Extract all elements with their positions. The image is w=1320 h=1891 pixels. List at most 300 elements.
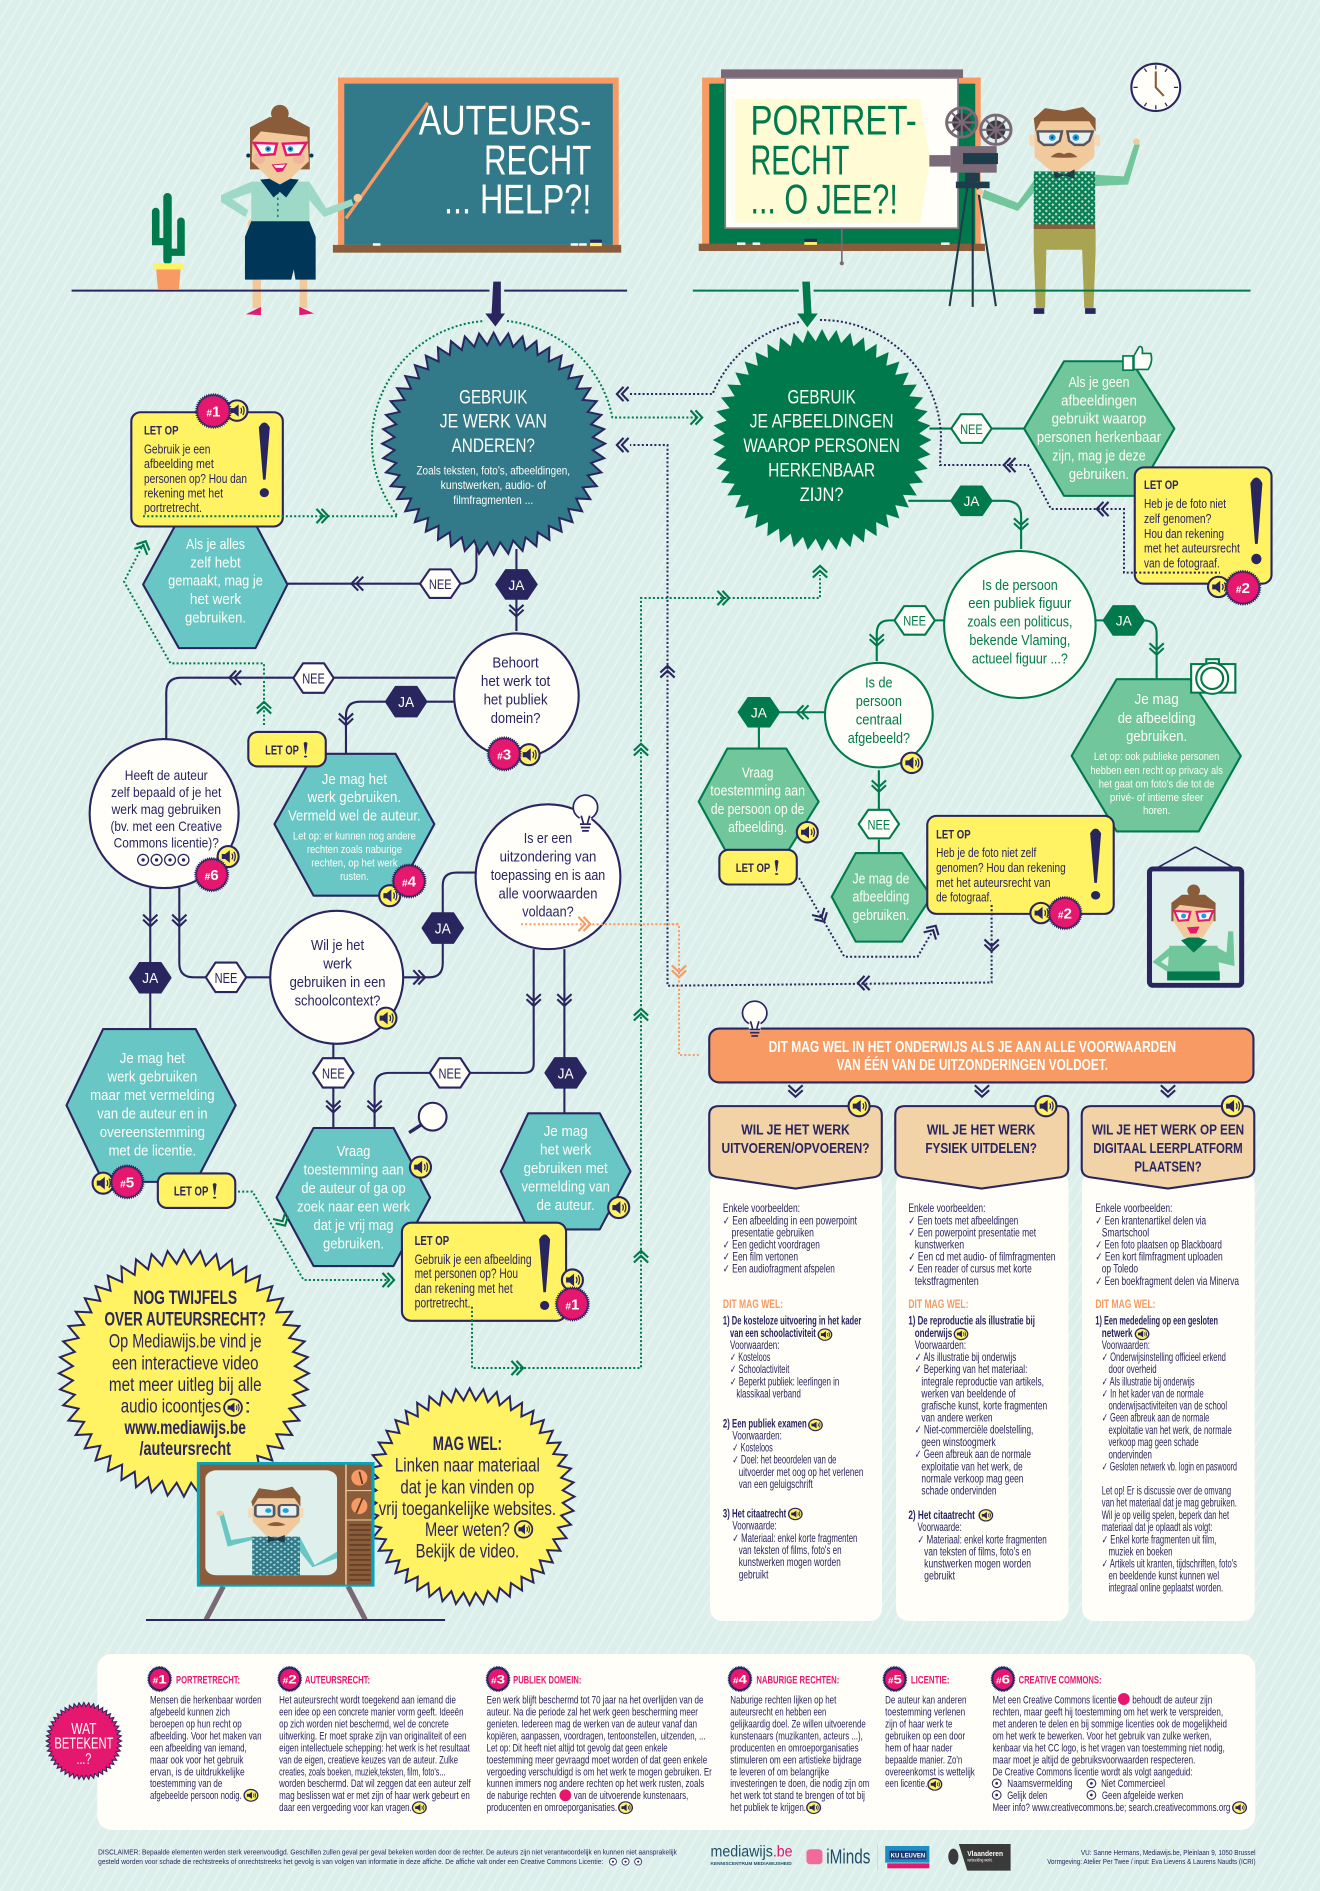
hexagon: je mag het werk gebruiken met vermelding: vermelding van [521,1179,610,1196]
heading: fysiek uitdelen: WIL JE HET WERK [927,1122,1036,1139]
definition: licentie: een licentie. [885,1777,927,1790]
panel: nog twijfels over auteursrecht [59,1250,309,1497]
callout: let op foto niet zelf genomen: Heb je de foto niet zelf [936,845,1036,860]
text: disclaimer: DISCLAIMER: Bepaalde elementen werden sterk vereenvoudigd. Geschillen zullen geval per geval bekeken worden door de rechter. De auteurs zijn niet verantwoordelijk en kunnen niet aansprakelijk [98,1847,677,1856]
callout: let op foto niet zelf genomen: LET OP [936,828,971,841]
callout: let op foto niet zelf genomen: de fotograaf. [936,890,992,905]
definition: licentie: De auteur kan anderen [885,1694,966,1706]
text: fysiek uitdelen voorbeelden en voorwaarden: Voorwaarde: [917,1520,962,1534]
definition: auteursrecht: Het auteursrecht wordt toegekend aan iemand die [279,1694,456,1706]
section: auteursrecht flow [66,633,630,1321]
label: ja: JA [508,577,525,593]
question: is de persoon een publiek figuur: een publiek figuur [968,595,1071,612]
definition: portretrecht: maar ook voor het gebruik [150,1754,244,1766]
panel: question gebruik je afbeeldingen: HERKENBAAR [768,460,875,482]
text: uitvoeren voorbeelden en voorwaarden: ✓ Doel: het beoordelen van de [732,1453,836,1466]
callout: let op auteursrecht fotograaf: LET OP [1144,478,1179,492]
callout: let op portretrecht [131,394,283,527]
callout: let op small [719,850,797,884]
callout: let op portretrecht second [402,1223,589,1321]
definition: naburige rechten [727,1666,869,1814]
text: uitvoeren voorbeelden en voorwaarden: ✓ Kosteloos [732,1441,773,1454]
definition: creative commons: Naamsvermelding [1007,1777,1072,1790]
hexagon: je mag het werk gebruiken met vermelding: het werk [540,1142,592,1159]
hexagon: als je geen afbeeldingen gebruikt: gebruikt waarop [1052,411,1146,428]
text: uitvoeren voorbeelden en voorwaarden: Voorwaarden: [732,1428,782,1442]
hexagon: je mag de afbeelding gebruiken publieke personen [1072,679,1241,831]
hexagon: je mag het werk gebruiken met vermelding [501,1113,630,1229]
callout: let op auteursrecht fotograaf [1135,467,1272,605]
panel: question gebruik je werk van anderen: filmfragmenten ... [453,493,533,507]
definition: auteursrecht: #2 [283,1673,297,1686]
hexagon: als je geen afbeeldingen gebruikt: zijn, mag je deze [1052,448,1146,464]
question: is er een uitzondering van toepassing: Is er een [524,830,572,847]
banner: dit mag wel in het onderwijs: VAN ÉÉN VAN DE UITZONDERINGEN VOLDOET. [837,1055,1108,1074]
text: fysiek uitdelen voorbeelden en voorwaarden: schade ondervinden [921,1484,997,1497]
text: leerplatform voorbeelden en voorwaarden: en beeldende kunst kunnen wel [1108,1568,1219,1582]
panel: nog twijfels over auteursrecht: : [244,1395,251,1417]
text: uitvoeren voorbeelden en voorwaarden: ✓ Een afbeelding in een powerpoint [723,1213,857,1227]
definition: naburige rechten: kunstenaars (muzikanten, acteurs ...), [730,1730,863,1742]
definition: licentie [882,1666,975,1790]
panel: question gebruik je werk van anderen: Zoals teksten, foto's, afbeeldingen, [416,463,570,477]
panel: question gebruik je afbeeldingen: JE AFBEELDINGEN [750,411,894,433]
hexagon: je mag de afbeelding gebruiken publieke personen: horen. [1143,804,1170,817]
text: uitvoeren voorbeelden en voorwaarden: uitvoerder met oog op het verlenen [739,1465,863,1479]
question: is er een uitzondering van toepassing: toepassing en is aan [491,867,605,884]
hexagon: als je geen afbeeldingen gebruikt: afbeeldingen [1061,393,1137,409]
definition: naburige rechten: stimuleren om een artistieke bijdrage [730,1754,862,1766]
text: uitvoeren voorbeelden en voorwaarden: 2) Een publiek examen [723,1416,807,1430]
definition: licentie: gebruiken op een door [885,1730,965,1742]
label: ja: JA [1116,613,1132,629]
callout: let op portretrecht: personen op? Hou dan [144,471,247,486]
callout: let op portretrecht: #1 [206,404,220,420]
badge: wat betekent: ...? [77,1750,91,1767]
text: fysiek uitdelen voorbeelden en voorwaarden: ✓ Niet-commerciële doelstelling, [915,1423,1033,1436]
hexagon: je mag het werk gebruiken met vermelding: de auteur. [537,1197,595,1214]
text: uitvoeren voorbeelden en voorwaarden: Voorwaarde: [732,1519,777,1532]
text: uitvoeren voorbeelden en voorwaarden: kunstwerken mogen worden [739,1555,841,1569]
hexagon: als je geen afbeeldingen gebruikt [1024,361,1174,496]
hexagon: je mag het werk gebruiken met vermelding: Je mag [544,1123,588,1140]
question: behoort het werk tot het publiek domein: domein? [491,710,540,727]
callout: let op foto niet zelf genomen [927,816,1114,929]
definition: licentie: bepaalde manier. Zo'n [885,1754,962,1766]
definition: publiek domein: auteur. Na die periode zal het werk geen bescherming meer [487,1706,698,1718]
section: portretrecht header and first question [693,64,1272,605]
blackboard: portretrecht with projection screen [699,69,985,265]
definition: auteursrecht: een idee op een concrete manier vorm geeft. Ideeën [279,1706,464,1718]
question: wil je het werk gebruiken in een schoolcontext: werk [322,955,352,972]
hexagon: als je alles zelf hebt gemaakt: gemaakt, mag je [168,573,263,590]
title: auteursrecht help: ... HELP?! [444,176,591,222]
definition: publiek domein: producenten en omroeporganisaties. [487,1801,617,1814]
illustration: framed portrait of teacher [1149,847,1242,985]
text: uitvoeren voorbeelden en voorwaarden: ✓ Beperkt publiek: leerlingen in [730,1375,839,1388]
hexagon: vraag toestemming aan de persoon: Vraag [742,765,773,781]
definition: publiek domein: van de uitvoerende kunstenaars, [574,1789,688,1802]
text: fysiek uitdelen voorbeelden en voorwaarden: tekstfragmenten [915,1274,979,1288]
text: fysiek uitdelen voorbeelden en voorwaarden: kunstwerken [915,1238,964,1251]
label: nee: NEE [439,1066,461,1082]
question: is er een uitzondering van toepassing: alle voorwaarden [499,886,597,903]
callout: let op small [158,1173,235,1208]
title: auteursrecht help [419,97,591,222]
panel: nog twijfels over auteursrecht: www.mediawijs.be [124,1416,246,1438]
callout: let op portretrecht: Gebruik je een [144,442,210,456]
text: uitvoeren voorbeelden en voorwaarden: van een schoolactiviteit [730,1326,816,1340]
label: nee [951,414,992,443]
text: fysiek uitdelen voorbeelden en voorwaarden: geen winstoogmerk [921,1435,996,1449]
label: ja: JA [558,1066,574,1082]
text: disclaimer: gesteld worden voor schade die rechtstreeks of onrechtstreeks het gevolg is van volgen van informatie in deze affiche. De affiche valt onder een Creative Commons Licentie: [98,1857,603,1866]
hexagon: je mag het werk gebruiken met licentie: met de licentie. [109,1142,196,1159]
blackboard: auteursrecht [333,78,621,253]
text: uitvoeren voorbeelden en voorwaarden: klassikaal verband [736,1387,801,1400]
panel: mag wel linken naar materiaal [365,1388,575,1605]
definition: creative commons: Niet Commercieel [1101,1777,1165,1790]
badge: wat betekent [46,1702,122,1780]
hexagon: je mag de afbeelding gebruiken small [832,853,931,942]
text: uitvoeren voorbeelden en voorwaarden: Voorwaarden: [730,1338,779,1352]
panel: wat betekent definitions [46,1654,1255,1830]
callout: let op foto niet zelf genomen: met het auteursrecht van [936,875,1051,890]
logo: vlaanderen: Vlaanderen [967,1849,1003,1858]
text: fysiek uitdelen voorbeelden en voorwaarden: DIT MAG WEL: [908,1297,968,1311]
definition: auteursrecht: op zich worden niet beschermd, wel de concrete [279,1718,449,1730]
title: portretrecht o jee [750,97,917,222]
text: fysiek uitdelen voorbeelden en voorwaarden: exploitatie van het werk, de [921,1459,1023,1473]
panel: question gebruik je werk van anderen: JE WERK VAN [440,411,547,433]
logo: ku leuven: KU LEUVEN [891,1851,925,1859]
hexagon: je mag het werk gebruiken met vermelding: gebruiken met [524,1160,608,1177]
callout: let op small: LET OP [736,861,770,875]
hexagon: vraag toestemming aan de auteur: dat je vrij mag [314,1217,394,1234]
callout: let op portretrecht second: met personen op? Hou [415,1266,518,1281]
text: fysiek uitdelen voorbeelden en voorwaarden: ✓ Een toets met afbeeldingen [908,1213,1018,1227]
definition: publiek domein: genieten. Iedereen mag de werken van de auteur vanaf dan [487,1718,697,1730]
illustration: man with bow tie [977,107,1140,314]
callout: let op foto niet zelf genomen: genomen? Hou dan rekening [936,860,1066,875]
text: uitvoeren voorbeelden en voorwaarden: ✓ Een gedicht voordragen [723,1238,820,1251]
definition: portretrecht: toestemming van de [150,1777,222,1790]
label: nee [859,810,899,838]
definition: naburige rechten: het werk tot stand te brengen of tot bij [730,1789,865,1802]
text: leerplatform voorbeelden en voorwaarden: DIT MAG WEL: [1095,1297,1156,1311]
panel: question gebruik je afbeeldingen: GEBRUIK [788,387,856,408]
icon: magnifying glass [409,1103,447,1133]
question: is de persoon centraal afgebeeld: Is de [865,675,893,692]
banner: dit mag wel in het onderwijs [709,1029,1253,1082]
text: uitvoeren voorbeelden en voorwaarden: ✓ Schoolactiviteit [730,1362,790,1376]
label: ja: JA [751,705,767,721]
hexagon: je mag de afbeelding gebruiken small: Je mag de [853,870,909,887]
definition: creative commons: behoudt de auteur zijn [1132,1694,1212,1706]
label: nee [206,963,246,992]
callout: let op auteursrecht fotograaf: #2 [1236,580,1250,597]
text: uitvoeren voorbeelden en voorwaarden: van een geluigschrift [739,1477,813,1491]
question: wil je het werk gebruiken in een schoolcontext: schoolcontext? [295,993,380,1010]
definition: auteursrecht: creaties, zoals boeken, muziek,teksten, film, foto's... [279,1766,445,1778]
text: leerplatform voorbeelden en voorwaarden: verkoop mag geen schade [1108,1435,1199,1449]
question: is de persoon centraal afgebeeld [825,663,933,773]
hexagon: je mag de afbeelding gebruiken publieke personen: privé- of intieme sfeer [1110,791,1203,804]
callout: let op portretrecht: LET OP [144,424,178,438]
label: ja [130,963,170,992]
text: fysiek uitdelen voorbeelden en voorwaarden: ✓ Beperking van het materiaal: [915,1362,1027,1376]
illustration: retro tv with man [146,1462,445,1620]
heading: fysiek uitdelen [895,1096,1068,1189]
text: leerplatform voorbeelden en voorwaarden: materiaal dat je oplaadt als volgt: [1102,1520,1212,1534]
callout: let op portretrecht: portretrecht. [144,500,202,515]
definition: portretrecht [147,1666,262,1802]
hexagon: je mag het werk gebruiken met licentie [66,1029,236,1199]
label: nee [313,1058,354,1088]
hexagon: je mag de afbeelding gebruiken publieke personen: de afbeelding [1118,710,1196,727]
label: ja [545,1058,586,1088]
icon: thumbs up [1123,347,1152,370]
panel: mag wel linken naar materiaal: MAG WEL: [433,1432,502,1454]
definition: publiek domein: Een werk blijft beschermd tot 70 jaar na het overlijden van de [487,1694,703,1706]
question: heeft de auteur zelf bepaald: Heeft de auteur [125,767,208,783]
text: leerplatform voorbeelden en voorwaarden: onderwijsactiviteiten van de school [1108,1399,1227,1412]
text: fysiek uitdelen voorbeelden en voorwaarden: kunstwerken mogen worden [924,1557,1031,1570]
label: nee: NEE [322,1066,345,1082]
definition: naburige rechten: NABURIGE RECHTEN: [756,1673,839,1686]
definition: creative commons: Geen afgeleide werken [1102,1789,1183,1802]
icon: light bulb [573,795,598,831]
hexagon: je mag het werk gebruiken met licentie: maar met vermelding [90,1087,215,1104]
hexagon: als je alles zelf hebt gemaakt: zelf hebt [190,555,242,571]
hexagon: je mag de afbeelding gebruiken small: afbeelding [853,889,909,906]
hexagon: je mag de afbeelding gebruiken publieke personen: Je mag [1135,691,1179,708]
text: leerplatform voorbeelden en voorwaarden: ✓ Een kort filmfragment uploaden [1095,1250,1223,1263]
logo: mediawijs: KENNISCENTRUM MEDIAWIJSHEID [711,1861,792,1867]
panel: nog twijfels over auteursrecht: audio icoontjes [121,1395,221,1417]
text: fysiek uitdelen voorbeelden en voorwaarden: 1) De reproductie als illustratie bij [908,1314,1035,1327]
heading: uitvoeren opvoeren [709,1096,882,1189]
callout: let op portretrecht second: #1 [565,1296,579,1313]
text: uitvoeren voorbeelden en voorwaarden: ✓ Materiaal: enkel korte fragmenten [732,1531,857,1545]
hexagon: als je alles zelf hebt gemaakt: het werk [190,591,242,608]
hexagon: vraag toestemming aan de auteur: Vraag [337,1143,370,1160]
definition: auteursrecht: eigen intellectuele schepping: het werk is het resultaat [279,1742,470,1754]
hexagon: je mag het werk gebruiken met licentie: werk gebruiken [107,1069,197,1086]
heading: uitvoeren opvoeren: UITVOEREN/OPVOEREN? [721,1140,870,1157]
question: heeft de auteur zelf bepaald: werk mag gebruiken [111,801,221,817]
label: nee: NEE [215,971,237,987]
label: nee: NEE [302,672,325,688]
icon: cactus in pot [153,193,183,289]
question: wil je het werk gebruiken in een schoolcontext: Wil je het [311,937,365,954]
logo: vlaanderen: verbeelding werkt. [967,1858,992,1863]
panel: column digitaal leerplatform [1082,1096,1255,1621]
hexagon: je mag de afbeelding gebruiken publieke personen: gebruiken. [1126,728,1187,745]
label: ja [1104,606,1144,635]
text: fysiek uitdelen voorbeelden en voorwaarden: ✓ Geen afbreuk aan de normale [915,1447,1031,1461]
hexagon: als je alles zelf hebt gemaakt [143,527,287,648]
panel: nog twijfels over auteursrecht: Op Mediawijs.be vind je [109,1330,262,1352]
illustration: film projector on tripod [929,108,1011,307]
panel: nog twijfels over auteursrecht: met meer uitleg bij alle [109,1373,262,1395]
question: wil je het werk gebruiken in een schoolcontext [270,911,403,1044]
definition: licentie: hem of haar nader [885,1742,953,1754]
text: fysiek uitdelen voorbeelden en voorwaarden: ✓ Een reader of cursus met korte [908,1262,1032,1275]
callout: let op portretrecht second: portretrecht. [415,1296,471,1311]
panel: question gebruik je afbeeldingen [713,329,931,551]
logo: ku leuven [885,1846,929,1868]
text: fysiek uitdelen voorbeelden en voorwaarden: onderwijs [915,1326,952,1340]
callout: let op auteursrecht fotograaf: zelf genomen? [1144,511,1211,526]
text: fysiek uitdelen voorbeelden en voorwaarden: Enkele voorbeelden: [908,1201,985,1215]
callout: let op small [248,732,326,766]
hexagon: vraag toestemming aan de auteur: zoek naar een werk [297,1198,410,1215]
hexagon: je mag het werk gebruiken vermeld de auteur: rusten. [340,871,369,883]
section: extra information bursts and tv [59,1250,575,1620]
text: leerplatform voorbeelden en voorwaarden: ✓ Een krantenartikel delen via [1095,1213,1207,1227]
definition: licentie: LICENTIE: [911,1673,950,1686]
text: leerplatform voorbeelden en voorwaarden: Smartschool [1102,1226,1149,1239]
hexagon: je mag het werk gebruiken vermeld de auteur: Let op: er kunnen nog andere [293,831,416,843]
definition: naburige rechten: #4 [733,1673,747,1686]
panel: column wil je het werk fysiek uitdelen [895,1096,1068,1621]
question: behoort het werk tot het publiek domein: het publiek [484,692,548,709]
definition: licentie: #5 [888,1673,902,1686]
question: behoort het werk tot het publiek domein: #3 [497,746,511,763]
label: ja [739,698,779,727]
text: uitvoeren voorbeelden en voorwaarden: presentatie gebruiken [732,1226,814,1239]
question: is de persoon centraal afgebeeld: afgebeeld? [848,730,910,747]
dotted connector: orange to exceptions banner [521,917,699,1055]
arrow: down to first question [485,282,505,327]
hexagon: je mag de afbeelding gebruiken publieke personen: hebben een recht op privacy als [1090,764,1223,777]
heading: digitaal leerplatform: DIGITAAL LEERPLATFORM [1093,1140,1243,1157]
hexagon: je mag de afbeelding gebruiken publieke personen: het gaat om foto's die tot de [1099,777,1215,790]
label: ja [496,570,537,599]
dotted connectors: green portretrecht links [124,321,820,1368]
heading: fysiek uitdelen: FYSIEK UITDELEN? [925,1140,1037,1157]
text: leerplatform voorbeelden en voorwaarden: integraal online geplaatst worden. [1108,1581,1223,1594]
callout: let op portretrecht second: dan rekening met het [415,1281,513,1296]
hexagon: als je alles zelf hebt gemaakt: Als je alles [186,536,245,553]
title: portretrecht o jee: PORTRET- [750,97,917,144]
logo: mediawijs [711,1843,793,1867]
text: uitvoeren voorbeelden en voorwaarden: DIT MAG WEL: [723,1297,783,1311]
panel: question gebruik je afbeeldingen: WAAROP PERSONEN [743,436,900,457]
definition: licentie: zijn of haar werk te [885,1718,953,1730]
text: fysiek uitdelen voorbeelden en voorwaarden: van andere werken [921,1411,993,1424]
text: leerplatform voorbeelden en voorwaarden: 1) Een mededeling op een gesloten [1095,1314,1218,1327]
question: behoort het werk tot het publiek domein: Behoort [492,655,539,672]
text: leerplatform voorbeelden en voorwaarden: Enkele voorbeelden: [1095,1201,1173,1215]
definition: auteursrecht: AUTEURSRECHT: [305,1673,370,1686]
text: leerplatform voorbeelden en voorwaarden [1095,1201,1240,1594]
text: leerplatform voorbeelden en voorwaarden: ✓ Een foto plaatsen op Blackboard [1095,1238,1222,1251]
title: auteursrecht help: AUTEURS- [419,97,591,144]
definition: naburige rechten: gelijkaardig doel. Ze willen uitvoerende [730,1718,866,1730]
question: heeft de auteur zelf bepaald: zelf bepaald of je het [111,784,221,800]
hexagon: je mag het werk gebruiken vermeld de auteur: rechten zoals naburige [307,844,402,856]
question: is de persoon centraal afgebeeld: centraal [856,712,902,728]
section: portretrecht flow [699,551,1253,1097]
label: nee [430,1058,470,1088]
hexagon: vraag toestemming aan de persoon: afbeelding. [728,819,787,836]
text: fysiek uitdelen voorbeelden en voorwaarden: ✓ Als illustratie bij onderwijs [915,1350,1016,1364]
text: fysiek uitdelen voorbeelden en voorwaarden: ✓ Een powerpoint presentatie met [908,1226,1036,1239]
definition: creative commons: Met een Creative Commons licentie [992,1694,1117,1706]
logo: iminds [806,1845,870,1868]
hexagon: je mag het werk gebruiken met licentie: Je mag het [120,1050,186,1067]
question: heeft de auteur zelf bepaald: Commons licentie)? [114,835,219,851]
definition: portretrecht: Mensen die herkenbaar worden [150,1694,262,1706]
text: leerplatform voorbeelden en voorwaarden: door overheid [1108,1362,1157,1376]
hexagon: vraag toestemming aan de persoon: de persoon op de [711,801,804,818]
title: portretrecht o jee: RECHT [750,137,849,183]
panel: question gebruik je werk van anderen: kunstwerken, audio- of [441,478,546,492]
question: is de persoon een publiek figuur [944,551,1096,698]
logos: partners [711,1843,1256,1871]
panel: question gebruik je werk van anderen [382,333,605,555]
text: leerplatform voorbeelden en voorwaarden: netwerk [1102,1326,1133,1340]
question: wil je het werk gebruiken in een schoolcontext: gebruiken in een [290,974,386,991]
hexagon: je mag het werk gebruiken met licentie: #5 [120,1174,134,1191]
callout: let op auteursrecht fotograaf: Heb je de foto niet [1144,496,1226,511]
callout: let op small: LET OP [265,744,299,758]
question: is er een uitzondering van toepassing: uitzondering van [500,849,596,866]
text: fysiek uitdelen voorbeelden en voorwaarden: van teksten of films, foto's en [924,1544,1031,1558]
panel: mag wel linken naar materiaal: Bekijk de video. [416,1540,519,1562]
definition: naburige rechten: het publiek te krijgen. [730,1801,806,1814]
hexagon: als je alles zelf hebt gemaakt: gebruiken. [185,610,246,626]
label: nee [420,569,460,598]
question: behoort het werk tot het publiek domein [454,633,579,771]
text: fysiek uitdelen voorbeelden en voorwaarden: ✓ Materiaal: enkel korte fragmenten [917,1532,1047,1546]
text: colophon [1047,1848,1256,1866]
panel: column wil je het werk uitvoeren [709,1096,882,1621]
definition: naburige rechten: auteursrecht en hebben een [730,1706,826,1718]
text: leerplatform voorbeelden en voorwaarden: ✓ Als illustratie bij onderwijs [1102,1374,1195,1388]
panel: question gebruik je afbeeldingen: ZIJN? [800,484,844,506]
label: ja [386,687,426,716]
panel: nog twijfels over auteursrecht: /auteursrecht [139,1437,231,1459]
definition: portretrecht: een afbeelding van iemand, [150,1742,247,1754]
callout: let op auteursrecht fotograaf: Hou dan rekening [1144,526,1224,541]
text: uitvoeren voorbeelden en voorwaarden: ✓ Kosteloos [730,1350,770,1364]
text: fysiek uitdelen voorbeelden en voorwaarden: 2) Het citaatrecht [908,1508,975,1522]
hexagon: je mag het werk gebruiken vermeld de auteur [274,754,434,906]
label: nee: NEE [960,421,983,437]
panel: question gebruik je werk van anderen: GEBRUIK [459,387,528,408]
definition: portretrecht: afgebeeld kunnen zich [150,1706,230,1718]
definition: publiek domein: Let op: Dit heeft niet altijd tot gevolg dat geen enkele [487,1742,668,1754]
hexagon: vraag toestemming aan de auteur: de auteur of ga op [301,1180,406,1197]
text: uitvoeren voorbeelden en voorwaarden: ✓ Een audiofragment afspelen [723,1262,835,1275]
definition: auteursrecht [277,1666,471,1814]
callout: let op small: LET OP [174,1185,208,1199]
question: behoort het werk tot het publiek domein: het werk tot [481,673,551,690]
text: leerplatform voorbeelden en voorwaarden: muziek en boeken [1108,1544,1173,1558]
label: ja: JA [398,695,415,711]
heading: digitaal leerplatform: WIL JE HET WERK OP EEN [1092,1122,1244,1139]
text: fysiek uitdelen voorbeelden en voorwaarden: normale verkoop mag geen [921,1472,1023,1485]
text: uitvoeren voorbeelden en voorwaarden [723,1201,863,1581]
definition: licentie: toestemming verlenen [885,1706,965,1718]
definition: creative commons: #6 [996,1673,1010,1686]
text: fysiek uitdelen voorbeelden en voorwaarden [908,1201,1055,1582]
text: leerplatform voorbeelden en voorwaarden: ✓ Geen afbreuk aan de normale [1102,1411,1209,1424]
definition: creative commons: CREATIVE COMMONS: [1019,1673,1102,1686]
